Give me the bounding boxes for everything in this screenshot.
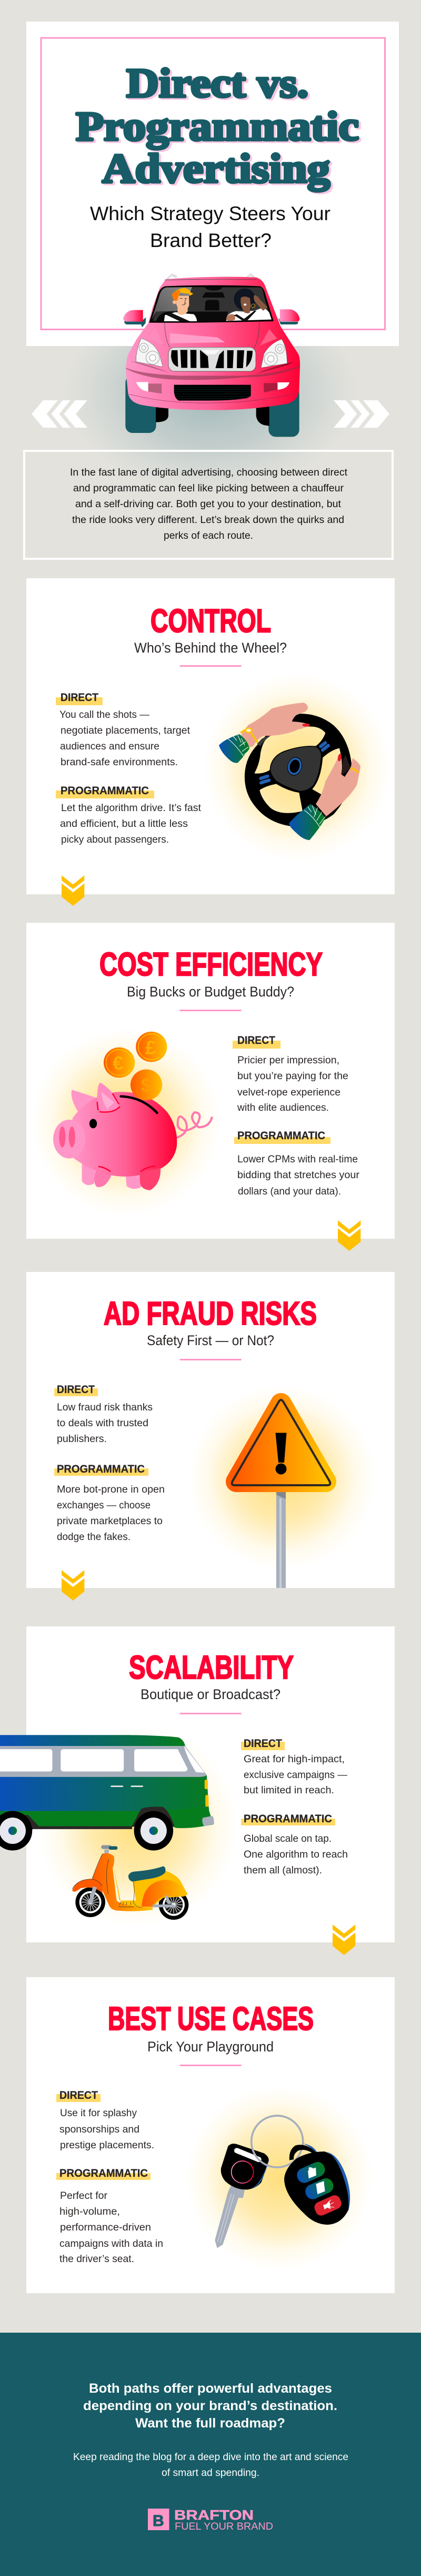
text block: control direct	[56, 692, 191, 768]
text block: control direct: DIRECT	[61, 692, 98, 704]
subtitle: Which Strategy Steers Your	[90, 203, 330, 224]
text block: control direct: negotiate placements, target	[61, 725, 191, 736]
text block: fraud programmatic: exchanges — choose	[57, 1499, 151, 1511]
text block: scalability programmatic: One algorithm to reach	[244, 1849, 348, 1860]
text block: cost programmatic: bidding that stretches your	[237, 1169, 360, 1181]
panel: intro text: the ride looks very different. Let’s break down the quirks and	[72, 514, 344, 526]
text block: cost direct: Pricier per impression,	[237, 1054, 339, 1066]
text block: fraud programmatic	[54, 1463, 165, 1543]
heading: control: CONTROL	[151, 603, 271, 639]
icon: left road arrow	[32, 399, 87, 429]
text block: cost programmatic: dollars (and your data).	[238, 1186, 341, 1197]
panel: cost efficiency	[26, 923, 395, 1251]
text block: control direct: You call the shots —	[59, 709, 149, 721]
subheading: ad fraud risks: Safety First — or Not?	[147, 1333, 274, 1348]
text block: scalability direct: exclusive campaigns —	[244, 1769, 347, 1781]
illustration: steering wheel with hands	[219, 703, 360, 840]
logo: Brafton	[148, 2507, 273, 2532]
icon: chevron down	[338, 1220, 360, 1251]
illustration: piggy bank with coins	[53, 1032, 212, 1190]
panel: control	[26, 578, 395, 906]
text block: fraud programmatic: PROGRAMMATIC	[57, 1463, 145, 1475]
title: Programmatic	[76, 103, 359, 149]
illustration glow: vehicles	[38, 1726, 238, 1927]
icon: chevron down	[62, 875, 84, 906]
text block: use cases programmatic: Perfect for	[60, 2190, 108, 2202]
text block: cost direct: velvet-rope experience	[237, 1087, 340, 1098]
logo: Brafton: BRAFTON	[174, 2507, 254, 2523]
text block: scalability direct: Great for high-impact,	[244, 1753, 345, 1765]
text block: control direct: brand-safe environments.	[61, 756, 178, 768]
panel: title card	[26, 22, 399, 346]
panel: scalability	[26, 1626, 395, 1955]
text block: use cases direct	[56, 2089, 154, 2151]
heading: closing statement: Both paths offer powerful advantages	[89, 2381, 332, 2396]
subheading: best use cases: Pick Your Playground	[147, 2039, 274, 2055]
text block: use cases programmatic: PROGRAMMATIC	[59, 2167, 148, 2179]
heading: closing statement: Want the full roadmap?	[135, 2416, 285, 2431]
illustration glow: warning sign	[188, 1385, 376, 1570]
title: Advertising	[104, 147, 332, 193]
illustration: piggy bank with coins: €	[113, 1052, 124, 1074]
text block: use cases direct: Use it for splashy	[60, 2107, 137, 2119]
text block: cost programmatic: Lower CPMs with real-time	[237, 1153, 358, 1165]
panel: intro text: In the fast lane of digital advertising, choosing between direct	[70, 467, 348, 478]
title: Direct vs.	[126, 60, 308, 106]
text block: fraud programmatic: private marketplaces to	[57, 1515, 163, 1527]
text block: cost direct	[233, 1034, 348, 1113]
text block: keep reading: Keep reading the blog for a deep dive into the art and science	[73, 2451, 348, 2463]
logo: Brafton: FUEL YOUR BRAND	[175, 2521, 273, 2532]
text block: scalability programmatic: PROGRAMMATIC	[244, 1813, 332, 1825]
text block: scalability direct	[241, 1738, 347, 1796]
panel: intro text: and a self-driving car. Both get you to your destination, but	[75, 498, 342, 510]
panel: intro text: and programmatic can feel like picking between a chauffeur	[73, 482, 344, 494]
heading: cost efficiency: COST EFFICIENCY	[99, 946, 323, 983]
text block: use cases programmatic: the driver’s seat.	[59, 2253, 134, 2265]
heading: closing statement: depending on your brand’s destination.	[83, 2399, 337, 2413]
text block: use cases programmatic: high-volume,	[59, 2206, 120, 2217]
text block: fraud direct	[54, 1384, 153, 1445]
text block: scalability programmatic	[241, 1813, 348, 1876]
text block: control direct: audiences and ensure	[60, 741, 159, 752]
subtitle: Brand Better?	[150, 230, 272, 251]
icon: chevron down	[62, 1570, 84, 1601]
heading: closing statement	[83, 2381, 337, 2431]
text block: scalability programmatic: Global scale on tap.	[244, 1833, 332, 1844]
icon: chevron down	[333, 1924, 355, 1955]
text block: use cases direct: sponsorships and	[59, 2124, 139, 2135]
text block: use cases direct: DIRECT	[59, 2089, 98, 2101]
title: Advertising	[102, 145, 330, 191]
text block: cost direct: with elite audiences.	[237, 1102, 329, 1113]
text block: use cases programmatic: campaigns with data in	[59, 2238, 163, 2249]
illustration glow: steering wheel	[204, 674, 391, 861]
illustration glow: piggy bank	[32, 1028, 221, 1216]
text block: cost programmatic: PROGRAMMATIC	[237, 1130, 325, 1142]
text block: cost direct: but you’re paying for the	[237, 1070, 348, 1082]
title: Direct vs.	[128, 62, 310, 107]
illustration: warning sign on post	[232, 1400, 330, 1588]
panel: footer call to action	[0, 2333, 421, 2576]
text block: control programmatic: Let the algorithm drive. It’s fast	[61, 802, 202, 814]
text block: scalability direct: but limited in reach.	[244, 1784, 334, 1796]
title: Programmatic	[78, 105, 361, 151]
text block: fraud direct: publishers.	[57, 1433, 107, 1445]
heading: best use cases: BEST USE CASES	[108, 2001, 314, 2037]
text block: cost direct: DIRECT	[237, 1034, 275, 1047]
illustration: piggy bank with coins: £	[145, 1037, 156, 1058]
subheading: cost efficiency: Big Bucks or Budget Buddy?	[127, 984, 294, 1000]
text block: fraud programmatic: dodge the fakes.	[57, 1531, 131, 1543]
title	[76, 60, 361, 193]
heading: scalability: SCALABILITY	[129, 1650, 294, 1686]
icon: right road arrow	[334, 399, 389, 429]
illustration glow: car keys	[186, 2086, 373, 2270]
text block: fraud direct: DIRECT	[57, 1384, 95, 1396]
subheading: control: Who’s Behind the Wheel?	[134, 640, 287, 656]
text block: control programmatic: and efficient, but a little less	[60, 818, 188, 830]
text block: fraud programmatic: More bot-prone in open	[57, 1484, 165, 1495]
text block: scalability direct: DIRECT	[244, 1738, 282, 1750]
text block: cost programmatic	[234, 1130, 360, 1197]
text block: keep reading: of smart ad spending.	[162, 2467, 259, 2479]
logo: Brafton: B	[153, 2512, 164, 2530]
illustration: green van	[0, 1735, 214, 1850]
text block: control programmatic: picky about passengers.	[61, 834, 169, 845]
text block: keep reading	[73, 2451, 348, 2479]
panel: best use cases	[26, 1977, 395, 2293]
heading: ad fraud risks: AD FRAUD RISKS	[104, 1296, 317, 1332]
text block: use cases programmatic: performance-driven	[60, 2222, 151, 2233]
illustration: piggy bank with coins: $	[141, 1075, 152, 1096]
illustration: car keys and fob	[215, 2116, 350, 2248]
subtitle	[90, 203, 330, 251]
text block: control programmatic	[56, 785, 202, 845]
panel: intro text: perks of each route.	[164, 530, 253, 541]
text block: use cases programmatic	[56, 2167, 163, 2265]
illustration: pink car with two passengers	[123, 273, 300, 437]
road shadow under car	[63, 292, 358, 492]
text block: scalability programmatic: them all (almost).	[244, 1864, 322, 1876]
panel: ad fraud risks	[26, 1272, 395, 1601]
text block: fraud direct: to deals with trusted	[57, 1417, 148, 1429]
text block: control programmatic: PROGRAMMATIC	[61, 785, 149, 797]
subheading: scalability: Boutique or Broadcast?	[141, 1686, 280, 1702]
text block: use cases direct: prestige placements.	[60, 2139, 154, 2151]
text block: fraud direct: Low fraud risk thanks	[57, 1401, 153, 1413]
illustration: orange scooter	[72, 1845, 188, 1920]
panel: intro text	[24, 451, 393, 559]
